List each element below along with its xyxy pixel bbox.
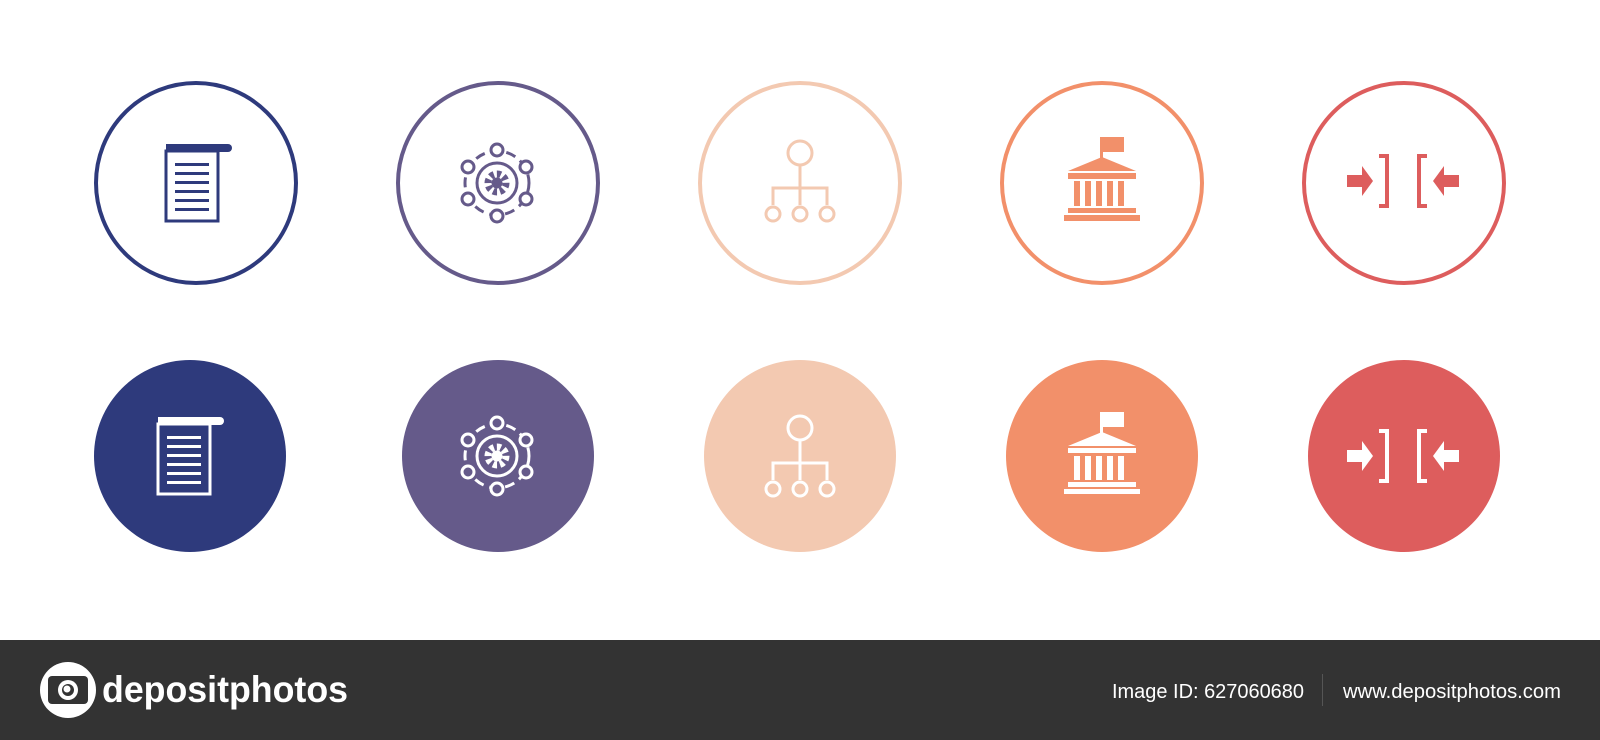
icon: hierarchy (filled)	[704, 360, 896, 552]
icon: gear network (outline)	[398, 83, 598, 283]
image id: Image ID: 627060680	[1112, 681, 1304, 703]
logo: camera icon	[40, 662, 96, 718]
logo: wordmark: depositphotos	[102, 669, 348, 710]
icon: government building (filled)	[1006, 360, 1198, 552]
icon: collapse arrows (outline)	[1304, 83, 1504, 283]
icon: collapse arrows (filled)	[1308, 360, 1500, 552]
icon: government building (outline)	[1002, 83, 1202, 283]
row 2: filled icons	[94, 360, 1500, 552]
website url: www.depositphotos.com	[1342, 681, 1561, 703]
icon: document (filled)	[94, 360, 286, 552]
row 1: outlined icons	[96, 83, 1504, 283]
icon: document (outline)	[96, 83, 296, 283]
footer bar	[0, 640, 1600, 740]
icon: gear network (filled)	[402, 360, 594, 552]
icon: hierarchy (outline)	[700, 83, 900, 283]
